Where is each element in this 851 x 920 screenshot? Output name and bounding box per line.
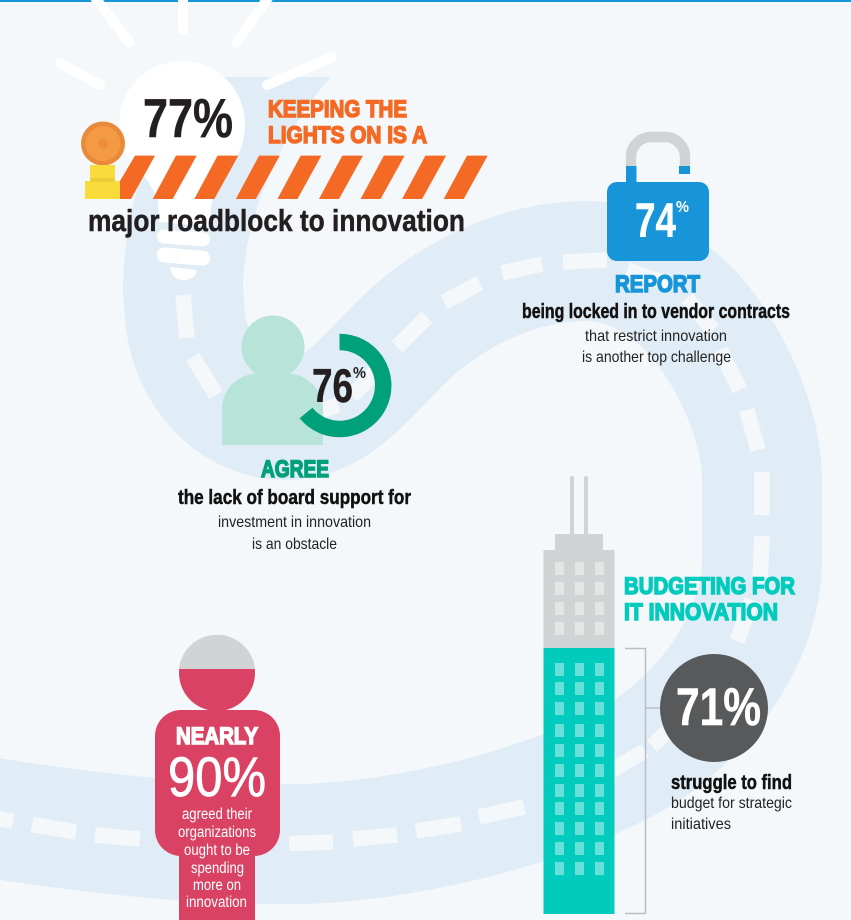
- stat: 90%: 90%: [168, 745, 266, 808]
- heading: it innovation: IT INNOVATION: [624, 599, 778, 626]
- roadblock stripes: [110, 156, 488, 199]
- text: vendor contracts: being locked in to vendor contracts: [522, 301, 790, 323]
- text: agreed their organizations: spending: [191, 860, 244, 877]
- stat circle: 71%: [660, 654, 768, 762]
- text: top challenge: is another top challenge: [582, 349, 731, 366]
- text: major roadblock: major roadblock to innovation: [88, 203, 465, 238]
- text: agreed their organizations: more on: [193, 877, 241, 894]
- icon: warning lamp: [81, 122, 125, 199]
- top bar: [0, 0, 851, 2]
- stat: 76%: 76: [312, 359, 353, 412]
- headline: keeping the lights on: [81, 87, 488, 238]
- icon: light bulb: [60, 0, 332, 226]
- heading: budgeting for: BUDGETING FOR: [624, 573, 795, 600]
- text: agreed their organizations: agreed their: [182, 806, 252, 823]
- panel: vendor lock-in: [522, 137, 790, 366]
- heading: nearly: NEARLY: [176, 723, 258, 750]
- heading: keeping the: KEEPING THE: [268, 96, 407, 123]
- text: struggle to find: struggle to find: [671, 772, 792, 794]
- text: agreed their organizations: innovation: [186, 894, 247, 911]
- chart: 76% ring: [306, 342, 383, 429]
- text: investment: investment in innovation: [218, 514, 371, 531]
- icon: person: [222, 316, 323, 445]
- panel: budgeting: [544, 476, 795, 914]
- panel: board support: %: [353, 365, 366, 382]
- text: obstacle: is an obstacle: [252, 536, 337, 553]
- panel: board support: [178, 316, 411, 553]
- bracket: [625, 648, 662, 914]
- stat: 77%: 77%: [143, 87, 233, 149]
- heading: lights on is a: LIGHTS ON IS A: [268, 122, 427, 149]
- text: agreed their organizations: organizations: [178, 824, 256, 841]
- text: agreed their organizations: [178, 806, 256, 911]
- panel: nearly 90%: [155, 635, 280, 920]
- stat circle: 71%: 71%: [676, 678, 761, 737]
- heading: agree: AGREE: [261, 456, 329, 483]
- stat: 74%: 74: [635, 195, 676, 248]
- icon: padlock: [607, 137, 709, 261]
- icon: red person: [155, 635, 280, 920]
- text: agreed their organizations: ought to be: [184, 842, 250, 859]
- icon: bulb base: [156, 229, 211, 280]
- text: restrict innovation: that restrict innovation: [585, 328, 727, 345]
- heading: report: REPORT: [615, 271, 700, 298]
- text: board support: the lack of board support for: [178, 487, 411, 509]
- icon: skyscraper: [544, 476, 614, 914]
- text: budget for strategic: budget for strategic: [671, 795, 792, 812]
- panel: vendor lock-in: %: [676, 199, 689, 216]
- text: initiatives: initiatives: [671, 816, 731, 833]
